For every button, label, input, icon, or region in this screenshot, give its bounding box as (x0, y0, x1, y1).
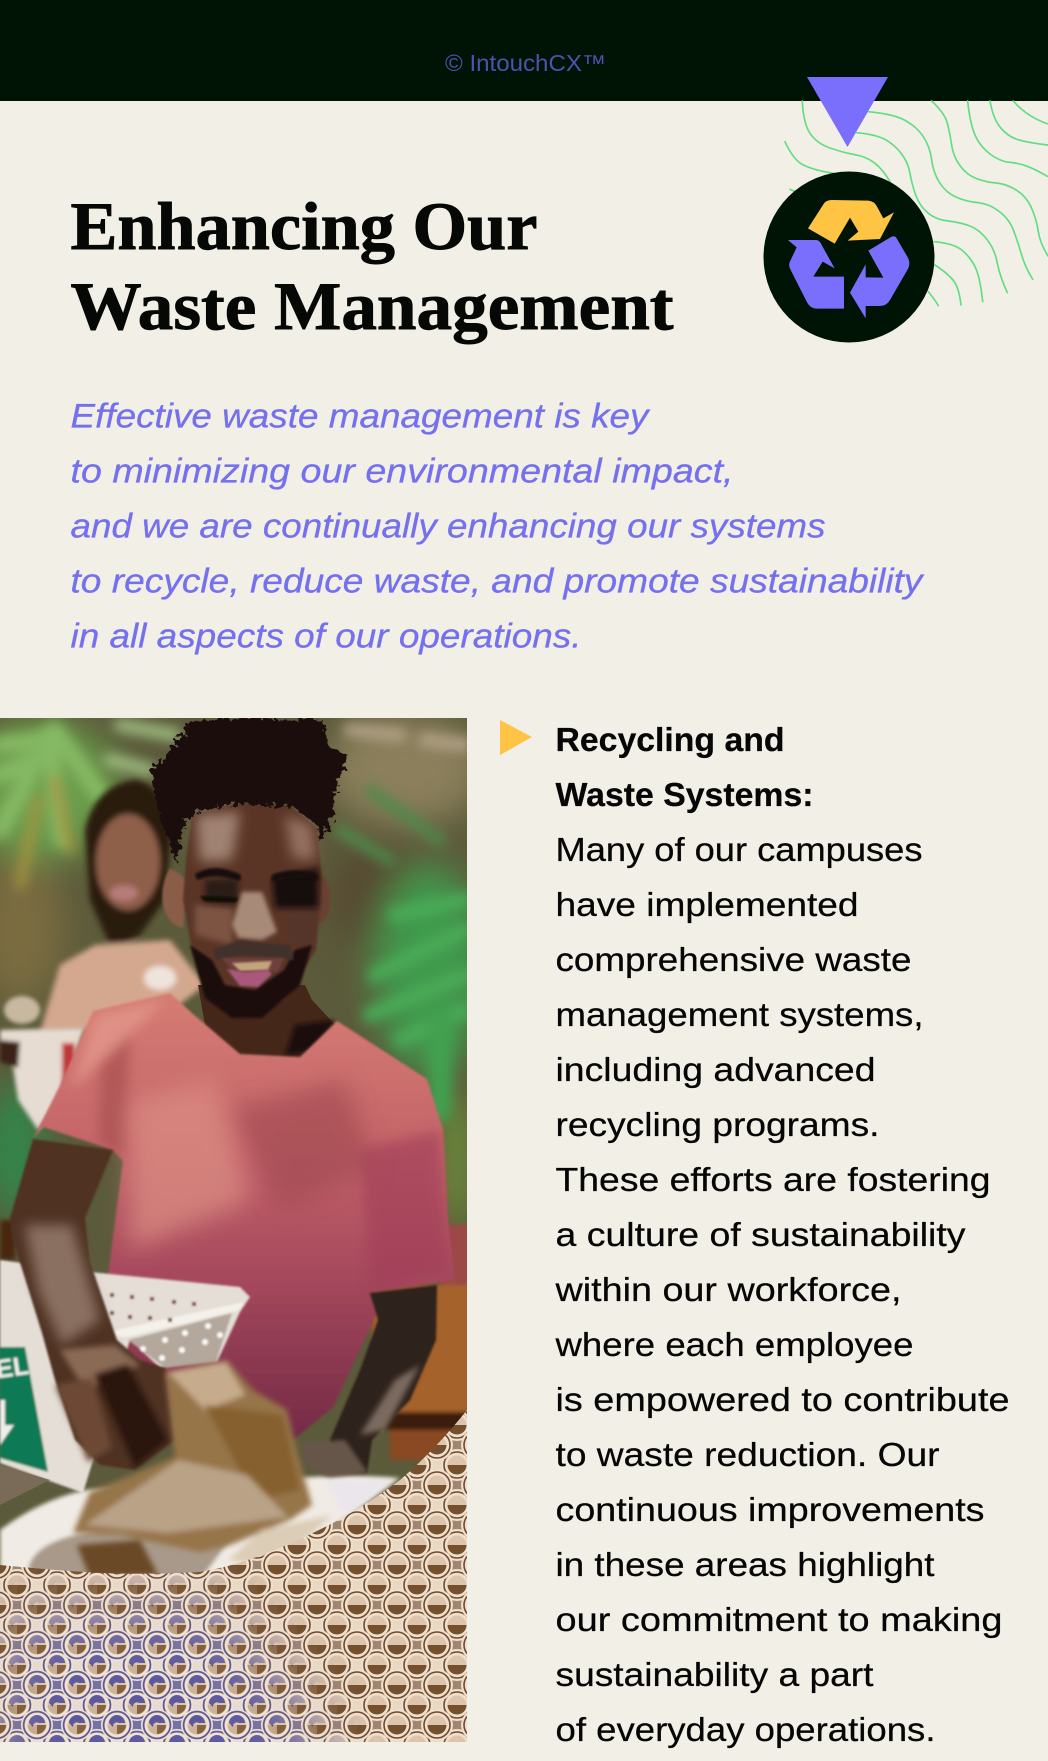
bullet paragraph: where each employee (554, 1326, 914, 1363)
bullet paragraph: management systems, (556, 996, 924, 1033)
icon: yellow bullet triangle (500, 720, 532, 755)
bullet paragraph: a culture of sustainability (556, 1216, 966, 1253)
lower right wooden background (0, 1220, 470, 1460)
bullet paragraph: is empowered to contribute (556, 1381, 1010, 1418)
intro italic paragraph: Effective waste management is key (70, 398, 651, 436)
background woman (40, 780, 205, 1032)
background woman's basket (0, 996, 84, 1130)
bullet paragraph: These efforts are fostering (556, 1161, 990, 1198)
bullet paragraph: in these areas highlight (556, 1546, 934, 1583)
bullet paragraph (554, 831, 1010, 1748)
bullet paragraph: continuous improvements (556, 1491, 984, 1528)
intro italic paragraph: and we are continually enhancing our systems (70, 508, 826, 546)
man: neck shadow (285, 1020, 335, 1056)
bullet paragraph: within our workforce, (554, 1271, 902, 1308)
man: right arm (300, 1285, 437, 1478)
background floor strip (0, 1465, 50, 1505)
bullet paragraph: to waste reduction. Our (556, 1436, 940, 1473)
white bin (0, 1475, 400, 1580)
bullet heading: Recycling and (556, 721, 784, 758)
copyright text: © IntouchCX™ (445, 50, 606, 76)
patterned bottom overlay (0, 1400, 467, 1742)
intro italic paragraph: to recycle, reduce waste, and promote sustainability (70, 562, 925, 600)
intro italic paragraph: in all aspects of our operations. (70, 618, 582, 656)
top header bar (0, 0, 1048, 101)
title: Waste Management (70, 268, 674, 344)
man: neck (198, 985, 340, 1060)
man: hair (150, 718, 348, 864)
bullet paragraph: including advanced (556, 1051, 876, 1088)
bullet paragraph: our commitment to making (556, 1601, 1002, 1638)
bullet paragraph: comprehensive waste (556, 941, 912, 978)
decorative green wave lines (785, 101, 1048, 306)
intro italic paragraph (70, 398, 925, 656)
icon: recycling symbol in dark circle (764, 172, 934, 342)
bullet heading: Waste Systems: (556, 776, 814, 813)
icon: purple down triangle (807, 77, 888, 147)
basket with green sign (0, 1260, 250, 1493)
bullet paragraph: recycling programs. (556, 1106, 880, 1143)
bullet paragraph: of everyday operations. (556, 1711, 936, 1748)
man: shirt light and shadow folds (70, 1000, 447, 1290)
photo background foliage (0, 718, 467, 1566)
bullet paragraph: sustainability a part (556, 1656, 874, 1693)
man: face and ears (162, 802, 330, 1018)
intro italic paragraph: to minimizing our environmental impact, (70, 452, 734, 490)
bullet paragraph: have implemented (556, 886, 858, 923)
photo: man sorting waste into recycling bins (0, 715, 485, 1742)
bullet paragraph: Many of our campuses (556, 831, 922, 868)
title (70, 188, 674, 344)
bullet heading (556, 721, 814, 813)
title: Enhancing Our (70, 188, 538, 264)
man: t-shirt (33, 993, 455, 1440)
crumpled paper bag (73, 1360, 392, 1578)
man: left arm and hand (10, 1139, 175, 1470)
body text (554, 721, 1010, 1748)
